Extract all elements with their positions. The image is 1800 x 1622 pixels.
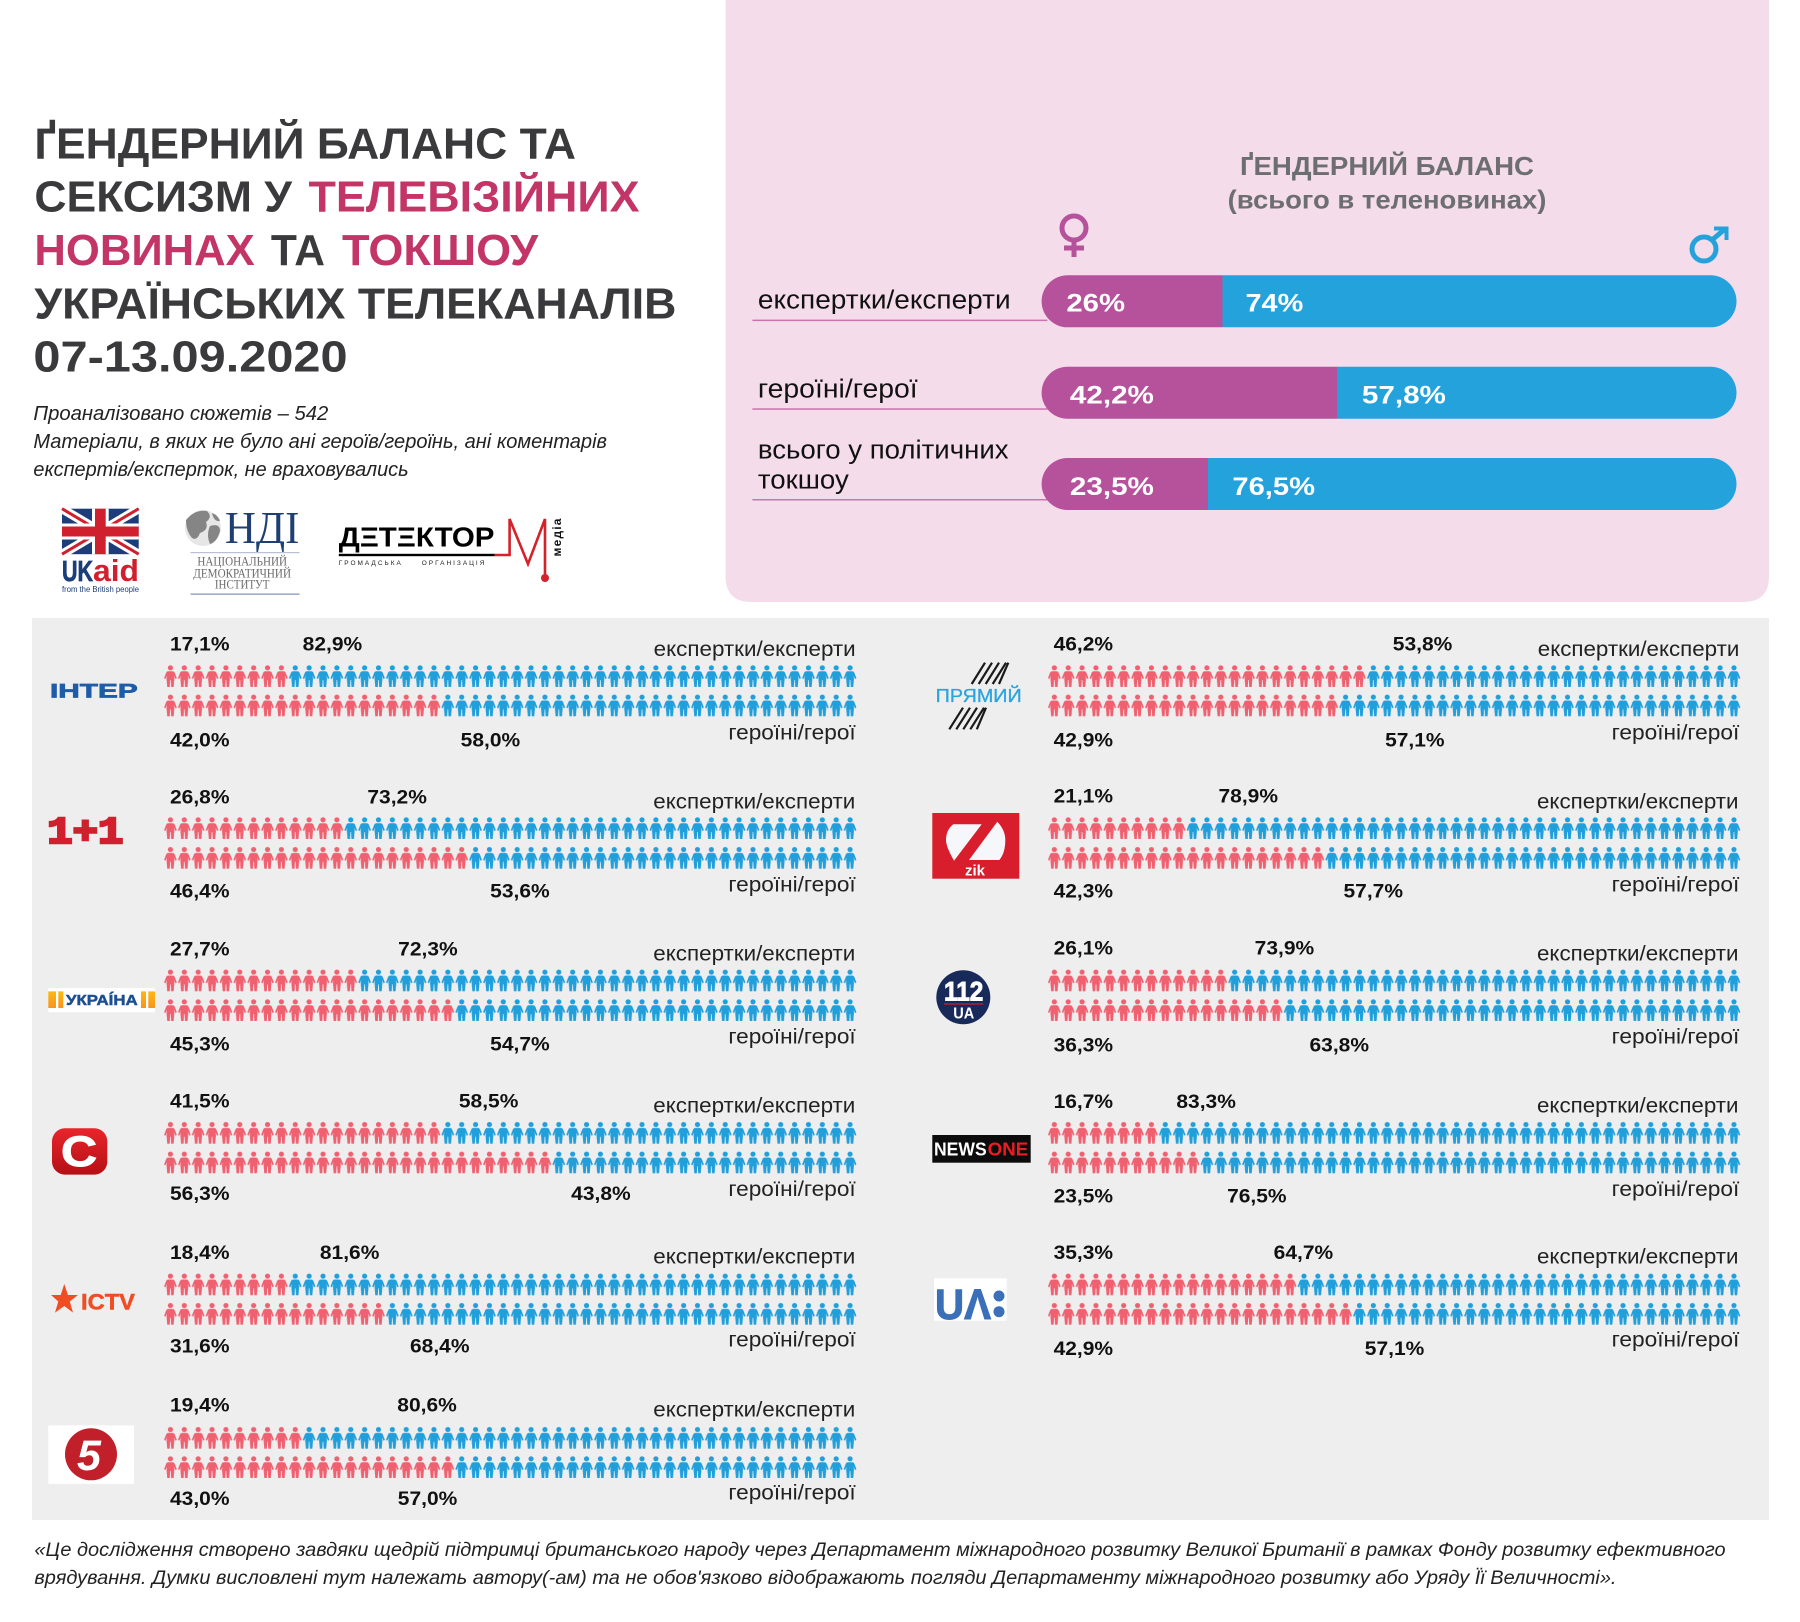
values: Channel 5: експертки/експерти xyxy=(653,1399,855,1422)
panel: overall gender balance xyxy=(726,0,1769,602)
values: Channel 5: героїні/герої xyxy=(728,1481,856,1504)
values: ZIK: 78,9% xyxy=(1218,785,1278,807)
bar: heroes: 57,8% xyxy=(1362,381,1446,409)
logo: 112 UA: 112 xyxy=(944,977,983,1007)
values: UA: героїні/герої xyxy=(1612,1328,1739,1351)
title: ҐЕНДЕРНИЙ БАЛАНС ТА xyxy=(34,118,576,168)
logo: STB: С xyxy=(61,1128,97,1176)
values: Ukraina: героїні/герої xyxy=(728,1025,856,1048)
pictogram rows: NewsOne xyxy=(1047,1122,1741,1174)
values: STB: героїні/герої xyxy=(728,1178,856,1201)
logo: NDI: НДІ xyxy=(225,502,299,553)
panel heading xyxy=(1228,151,1546,214)
values: Pryamyi xyxy=(1054,634,1739,752)
values: Inter: 42,0% xyxy=(170,730,230,752)
values: 112: 26,1% xyxy=(1054,937,1113,959)
values: UA: 35,3% xyxy=(1054,1242,1113,1264)
values: Channel 5 xyxy=(170,1395,856,1510)
values: Pryamyi: 46,2% xyxy=(1054,634,1113,656)
pictogram rows: ICTV xyxy=(164,1273,857,1325)
values: ICTV: 68,4% xyxy=(410,1335,470,1357)
logo: UA: UΛ xyxy=(935,1281,991,1329)
values: Channel 5: 80,6% xyxy=(397,1395,457,1417)
values: UA: 57,1% xyxy=(1365,1338,1424,1360)
values: UA xyxy=(1054,1242,1739,1360)
bar: political talk shows xyxy=(1042,458,1737,510)
logo: ICTV xyxy=(51,1284,135,1315)
values: 1+1 xyxy=(170,786,856,903)
pictogram rows: UA xyxy=(1047,1273,1741,1325)
values: 1+1: 53,6% xyxy=(490,881,550,903)
logo: 112 UA xyxy=(936,970,990,1024)
methodology note: Проаналізовано сюжетів – 542 xyxy=(33,403,328,425)
title: СЕКСИЗМ У xyxy=(34,172,293,222)
logo: ICTV: ICTV xyxy=(81,1290,135,1315)
pictogram rows: 112 xyxy=(1047,969,1741,1022)
values: Pryamyi: 42,9% xyxy=(1054,730,1113,752)
channel: Pryamyi xyxy=(936,634,1741,752)
bar: heroes xyxy=(1042,367,1737,419)
values: ZIK: 57,7% xyxy=(1344,880,1403,902)
values: STB: 56,3% xyxy=(170,1183,230,1205)
logo: Inter: ІНТЕР xyxy=(50,680,138,702)
title: 07-13.09.2020 xyxy=(33,332,348,381)
bar: experts: 26% xyxy=(1066,290,1125,318)
values: Pryamyi: експертки/експерти xyxy=(1538,638,1739,661)
methodology note xyxy=(33,403,607,481)
values: ZIK: експертки/експерти xyxy=(1537,790,1738,813)
values: Inter: експертки/експерти xyxy=(654,638,856,661)
title: ТЕЛЕВІЗІЙНИХ xyxy=(308,170,640,222)
row label: heroes: героїні/герої xyxy=(758,375,918,403)
logo: 112 UA: UA xyxy=(953,1005,975,1022)
footer disclaimer: «Це дослідження створено завдяки щедрій підтримці британського народу через Департамент міжнародного розвитку Великої Британії в рамках Фонду розвитку ефективного xyxy=(34,1539,1726,1561)
bar: experts xyxy=(1042,275,1737,327)
logo: NDI xyxy=(185,502,300,595)
values: Inter: 82,9% xyxy=(303,634,362,656)
values: UA: 64,7% xyxy=(1274,1242,1333,1264)
channel: STB xyxy=(52,1090,857,1205)
channel: 5 xyxy=(48,1395,857,1510)
values: NewsOne: 23,5% xyxy=(1054,1185,1113,1207)
bar: experts: 74% xyxy=(1246,290,1303,318)
bar: political talk shows: 23,5% xyxy=(1070,473,1154,501)
values: ICTV: 81,6% xyxy=(320,1242,379,1264)
channel: NewsOne xyxy=(932,1091,1741,1207)
values: 112: 36,3% xyxy=(1054,1035,1113,1057)
title: ТА xyxy=(271,226,325,275)
logo: Ukraina: УКРАÍНА xyxy=(66,992,138,1009)
values: 112 xyxy=(1054,937,1739,1057)
logo: Ukraina xyxy=(48,988,155,1012)
channel: Ukraina xyxy=(48,938,857,1056)
values: NewsOne: 83,3% xyxy=(1176,1091,1236,1113)
values: UA: експертки/експерти xyxy=(1537,1245,1738,1268)
values: Channel 5: 19,4% xyxy=(170,1395,230,1417)
values: ZIK: 21,1% xyxy=(1054,785,1113,807)
panel heading: ҐЕНДЕРНИЙ БАЛАНС xyxy=(1240,151,1534,181)
values: NewsOne: експертки/експерти xyxy=(1537,1095,1738,1118)
values: 1+1: 26,8% xyxy=(170,786,230,808)
values: 112: експертки/експерти xyxy=(1537,942,1738,965)
values: 1+1: героїні/герої xyxy=(728,874,856,897)
values: NewsOne: 76,5% xyxy=(1227,1185,1287,1207)
values: Pryamyi: 57,1% xyxy=(1385,730,1445,752)
channel: UA Pershyi xyxy=(934,1242,1741,1360)
logo: STB xyxy=(52,1128,107,1176)
logo: Detector Media xyxy=(339,518,564,582)
values: Inter: героїні/герої xyxy=(728,722,856,745)
logo: Pryamyi xyxy=(936,663,1022,729)
channel: 112 xyxy=(936,937,1741,1057)
logo: UK aid: from the British people xyxy=(62,584,139,594)
pictogram rows: 1+1 xyxy=(164,817,857,869)
values: 112: героїні/герої xyxy=(1612,1025,1739,1048)
row label: experts: експертки/експерти xyxy=(758,286,1011,314)
values: Inter: 17,1% xyxy=(170,634,230,656)
logo: Channel 5: 5 xyxy=(77,1432,102,1480)
logo: Pryamyi: ПРЯМИЙ xyxy=(936,685,1022,706)
icon: female symbol xyxy=(1062,216,1086,257)
values: NewsOne: 16,7% xyxy=(1054,1091,1113,1113)
values: STB xyxy=(170,1090,856,1205)
title: НОВИНАХ xyxy=(34,226,255,275)
values: ICTV: 31,6% xyxy=(170,1335,230,1357)
values: ZIK xyxy=(1054,785,1739,902)
channel: Inter xyxy=(50,634,857,752)
logo: UK aid: aid xyxy=(93,553,139,588)
values: STB: 43,8% xyxy=(571,1183,631,1205)
values: 1+1: експертки/експерти xyxy=(653,790,855,813)
values: Pryamyi: героїні/герої xyxy=(1612,722,1739,745)
title xyxy=(33,118,676,381)
values: NewsOne xyxy=(1054,1091,1739,1207)
values: Ukraina: 54,7% xyxy=(490,1034,550,1056)
pictogram rows: Pryamyi xyxy=(1047,665,1741,717)
row label: political talk shows: токшоу xyxy=(758,466,849,494)
values: 112: 73,9% xyxy=(1255,937,1314,959)
bar: political talk shows: 76,5% xyxy=(1232,473,1315,501)
logo: NDI: ДЕМОКРАТИЧНИЙ xyxy=(193,567,291,581)
channel: 1+1 xyxy=(47,786,857,903)
logo: NDI: НАЦІОНАЛЬНИЙ xyxy=(197,554,287,568)
logo: NDI: ІНСТИТУТ xyxy=(215,578,270,592)
logo: ZIK: zik xyxy=(965,863,986,880)
values: ZIK: героїні/герої xyxy=(1612,874,1739,897)
values: Channel 5: 57,0% xyxy=(398,1488,457,1510)
values: ZIK: 42,3% xyxy=(1054,880,1113,902)
values: Ukraina xyxy=(170,938,856,1056)
methodology note: експертів/експерток, не враховувались xyxy=(33,459,409,481)
pictogram rows: Ukraina xyxy=(164,969,857,1022)
logo: NewsOne: ONE xyxy=(988,1140,1028,1160)
panel: channels xyxy=(32,618,1769,1520)
logo: Detector Media: ДΞТΞКТОР xyxy=(339,522,494,553)
channel: ZIK xyxy=(932,785,1741,902)
values: Ukraina: 72,3% xyxy=(398,938,458,960)
values: ICTV: 18,4% xyxy=(170,1242,230,1264)
values: STB: експертки/експерти xyxy=(653,1095,855,1118)
methodology note: Матеріали, в яких не було ані героїв/героїнь, ані коментарів xyxy=(33,431,607,453)
values: STB: 58,5% xyxy=(459,1090,518,1112)
values: STB: 41,5% xyxy=(170,1090,230,1112)
bar: heroes: 42,2% xyxy=(1070,381,1154,409)
logo: NewsOne: NEWS xyxy=(934,1140,987,1160)
logo: Detector Media: ГРОМАДСЬКА ОРГАНІЗАЦІЯ xyxy=(339,560,485,567)
values: Inter: 58,0% xyxy=(461,730,520,752)
logo: UK aid xyxy=(62,509,139,594)
row label: political talk shows: всього у політичних xyxy=(758,436,1009,464)
pictogram rows: ZIK xyxy=(1047,817,1741,869)
values: Pryamyi: 53,8% xyxy=(1393,634,1452,656)
title: УКРАЇНСЬКИХ ТЕЛЕКАНАЛІВ xyxy=(34,279,676,328)
values: ICTV xyxy=(170,1242,856,1357)
logo: 1+1: 1+1 xyxy=(47,812,123,855)
panel heading: (всього в теленовинах) xyxy=(1228,184,1546,214)
pictogram rows: STB xyxy=(164,1122,857,1174)
footer disclaimer xyxy=(34,1539,1726,1589)
channel: ICTV xyxy=(51,1242,857,1357)
values: 112: 63,8% xyxy=(1310,1035,1369,1057)
values: 1+1: 46,4% xyxy=(170,881,230,903)
values: Ukraina: експертки/експерти xyxy=(653,942,855,965)
logo: Channel 5 xyxy=(48,1425,134,1484)
pictogram rows: Channel 5 xyxy=(164,1427,857,1478)
values: NewsOne: героїні/герої xyxy=(1612,1178,1739,1201)
values: 1+1: 73,2% xyxy=(367,786,427,808)
logo: UK aid: UK xyxy=(62,556,93,588)
pictogram rows: Inter xyxy=(164,665,857,717)
logo: NewsOne xyxy=(932,1135,1031,1163)
row label: political talk shows xyxy=(752,436,1047,500)
title: ТОКШОУ xyxy=(342,226,539,275)
footer disclaimer: врядування. Думки висловлені тут належать автору(-ам) та не обов'язково відображають погляди Департаменту міжнародного розвитку або Уряду Її Величності». xyxy=(34,1567,1616,1589)
values: Channel 5: 43,0% xyxy=(170,1488,230,1510)
values: ICTV: експертки/експерти xyxy=(653,1245,855,1268)
values: Ukraina: 45,3% xyxy=(170,1034,230,1056)
logo: ZIK xyxy=(932,813,1019,880)
logo: Detector Media: медіа xyxy=(550,518,564,556)
values: Ukraina: 27,7% xyxy=(170,938,230,960)
values: UA: 42,9% xyxy=(1054,1338,1113,1360)
icon: male symbol xyxy=(1692,228,1726,261)
values: ICTV: героїні/герої xyxy=(728,1328,856,1351)
values: Inter xyxy=(170,634,856,752)
